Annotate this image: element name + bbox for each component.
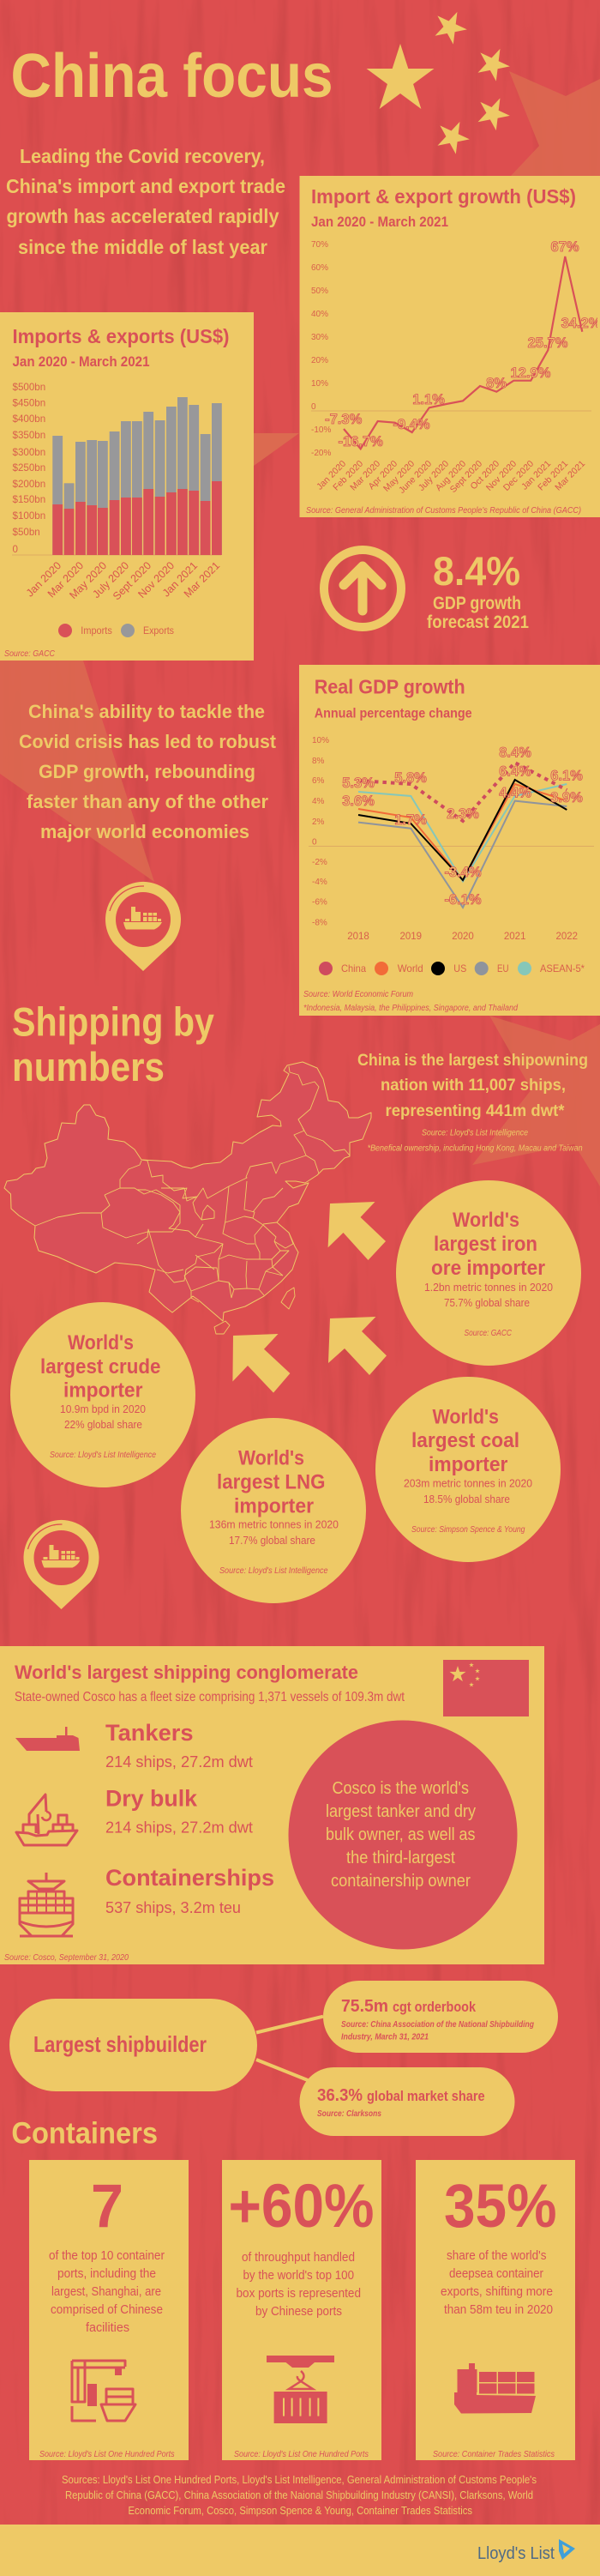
tankers: 214 ships, 27.2m dwt bbox=[105, 1753, 253, 1771]
y axis labels: 8% bbox=[312, 757, 325, 766]
card: 35%: exports, shifting more bbox=[441, 2285, 553, 2299]
card: 7: ports, including the bbox=[57, 2267, 156, 2281]
circle: Cosco callout bbox=[288, 1721, 518, 1949]
GDP text: GDP growth, rebounding bbox=[39, 761, 255, 782]
circle: coal: Source: Simpson Spence & Young bbox=[411, 1525, 525, 1535]
heading: Imports & exports (US$) bbox=[12, 325, 230, 347]
x axis labels: Feb 2021 bbox=[536, 459, 570, 492]
x axis labels: Oct 2020 bbox=[468, 459, 501, 492]
card: 7: of the top 10 container bbox=[49, 2249, 165, 2263]
x axis labels: Sept 2020 bbox=[448, 459, 484, 495]
x axis labels: 2020 bbox=[452, 932, 474, 942]
data labels: -16.7% bbox=[339, 434, 383, 449]
line chart bbox=[344, 256, 582, 449]
circle: coal: largest coal bbox=[411, 1429, 519, 1452]
data labels: 5.3% bbox=[342, 775, 375, 791]
imports bars bbox=[52, 481, 222, 555]
GDP text: major world economies bbox=[40, 821, 249, 842]
y axis labels bbox=[12, 382, 45, 555]
circle: LNG: 136m metric tonnes in 2020 bbox=[209, 1519, 339, 1531]
tankers bbox=[105, 1720, 253, 1771]
y axis labels: 10% bbox=[311, 379, 328, 389]
y axis labels: -20% bbox=[311, 449, 331, 458]
data labels: 5.8% bbox=[394, 770, 427, 786]
y axis labels: 0 bbox=[312, 837, 317, 848]
GDP text: China's ability to tackle the bbox=[28, 701, 265, 722]
x axis labels: Dec 2020 bbox=[501, 459, 536, 493]
line: EU bbox=[358, 801, 567, 908]
circle: coal: World's bbox=[432, 1405, 499, 1429]
x axis labels: Mar 2020 bbox=[348, 459, 382, 492]
card: 35%: share of the world's bbox=[447, 2249, 547, 2263]
line: World bbox=[358, 784, 567, 880]
circle: LNG: importer bbox=[234, 1495, 314, 1518]
y axis labels: -8% bbox=[312, 918, 327, 928]
icon: container hoist bbox=[267, 2356, 334, 2423]
legend: Imports bbox=[81, 624, 112, 636]
arrow: to map 1 bbox=[328, 1202, 386, 1260]
GDP text: Covid crisis has led to robust bbox=[19, 731, 276, 752]
y axis labels: -4% bbox=[312, 878, 327, 887]
dry bulk: 214 ships, 27.2m dwt bbox=[105, 1819, 253, 1837]
pill: orderbook: 75.5m bbox=[341, 1997, 388, 2016]
card: +60%: by Chinese ports bbox=[255, 2305, 342, 2319]
data labels: -7.3% bbox=[325, 412, 363, 427]
stat: GDP forecast bbox=[427, 548, 529, 632]
x axis labels: Apr 2020 bbox=[366, 459, 399, 492]
circle: LNG bbox=[181, 1418, 366, 1603]
y axis labels: $500bn bbox=[12, 382, 45, 393]
x axis labels: Mar 2020 bbox=[45, 559, 86, 600]
heading: Real GDP growth bbox=[315, 676, 465, 698]
x axis labels bbox=[315, 459, 587, 496]
data labels: 2.3% bbox=[447, 806, 479, 822]
data labels: 1.1% bbox=[412, 392, 445, 407]
containerships: Containerships bbox=[105, 1865, 274, 1891]
data labels: 4.4% bbox=[499, 786, 531, 801]
icon: containership bbox=[20, 1873, 73, 1936]
map of China bbox=[4, 1062, 371, 1334]
title: China focus bbox=[10, 42, 333, 111]
circle: coal: importer bbox=[429, 1453, 508, 1476]
y axis labels: 10% bbox=[312, 736, 329, 745]
sources text: Republic of China (GACC), China Association of the Naional Shipbuilding Industry (CANSI), Clarksons, World bbox=[65, 2489, 533, 2501]
x axis labels: July 2020 bbox=[90, 559, 131, 600]
circle: iron ore: 75.7% global share bbox=[444, 1297, 530, 1309]
data labels: 6.1% bbox=[550, 769, 583, 784]
y axis labels: 20% bbox=[311, 356, 328, 365]
circle: coal bbox=[375, 1377, 561, 1562]
pill: largest shipbuilder: Largest shipbuilder bbox=[33, 2031, 207, 2057]
subheading: State-owned Cosco has a fleet size comprising 1,371 vessels of 109.3m dwt bbox=[15, 1690, 405, 1704]
GDP text bbox=[19, 701, 276, 842]
data labels: 12.9% bbox=[511, 365, 551, 381]
x axis labels: Feb 2020 bbox=[331, 459, 365, 492]
card: +60%: Source: Lloyd's List One Hundred Ports bbox=[234, 2450, 369, 2459]
exports bars bbox=[52, 397, 222, 555]
card: 35%: 35% bbox=[444, 2173, 557, 2241]
data labels: 3.9% bbox=[550, 790, 583, 805]
circle: iron ore: 1.2bn metric tonnes in 2020 bbox=[424, 1282, 553, 1294]
x axis labels: 2019 bbox=[400, 932, 422, 942]
line: US bbox=[358, 780, 567, 880]
pill: largest shipbuilder bbox=[9, 1999, 257, 2091]
x axis labels: Jan 2021 bbox=[519, 459, 553, 492]
x axis labels bbox=[24, 559, 222, 602]
legend: US bbox=[453, 962, 466, 974]
data labels: -9.4% bbox=[393, 417, 430, 432]
circle: crude: World's bbox=[68, 1331, 134, 1354]
x axis labels: July 2020 bbox=[417, 459, 451, 493]
circle: LNG: 17.7% global share bbox=[229, 1535, 315, 1547]
data labels: 25.7% bbox=[528, 335, 568, 351]
circle: LNG: Source: Lloyd's List Intelligence bbox=[219, 1566, 328, 1576]
arrow: to map 3 bbox=[232, 1334, 290, 1393]
card: 35%: deepsea container bbox=[449, 2267, 543, 2281]
legend: World bbox=[398, 962, 423, 974]
card: 7: largest, Shanghai, are bbox=[51, 2285, 161, 2299]
legend: Exports bbox=[143, 624, 174, 636]
x axis labels: 2022 bbox=[556, 932, 578, 942]
footnote: *Indonesia, Malaysia, the Philippines, Singapore, and Thailand bbox=[303, 1004, 518, 1013]
data labels bbox=[342, 745, 583, 908]
y axis labels: $150bn bbox=[12, 494, 45, 505]
data labels: 1.7% bbox=[394, 812, 427, 828]
icon: dry bulk bbox=[16, 1795, 77, 1845]
x axis labels: Nov 2020 bbox=[135, 559, 177, 600]
GDP text: faster than any of the other bbox=[27, 791, 268, 812]
y axis labels: $350bn bbox=[12, 430, 45, 441]
y axis labels: 0 bbox=[12, 544, 18, 555]
card: 7: facilities bbox=[86, 2321, 129, 2335]
containerships: 537 ships, 3.2m teu bbox=[105, 1899, 241, 1916]
data labels bbox=[325, 239, 600, 449]
card: +60% bbox=[222, 2160, 381, 2460]
data labels: 34.2% bbox=[561, 316, 600, 331]
y axis labels: 50% bbox=[311, 287, 328, 296]
flag stars bbox=[367, 5, 515, 157]
circle: Cosco callout: bulk owner, as well as bbox=[326, 1825, 475, 1844]
legend: ASEAN-5* bbox=[540, 962, 585, 974]
heading: shipping by numbers bbox=[12, 1000, 215, 1090]
circle: Cosco callout: the third-largest bbox=[346, 1849, 455, 1867]
x axis labels: Jan 2020 bbox=[24, 559, 63, 599]
source: Source: General Administration of Customs People's Republic of China (GACC) bbox=[306, 506, 581, 516]
heading: shipping by numbers: Shipping by bbox=[12, 1000, 215, 1046]
icon: tanker bbox=[15, 1727, 80, 1751]
heading: Import & export growth (US$) bbox=[311, 185, 576, 208]
data labels: -6.1% bbox=[444, 892, 482, 908]
pill: orderbook bbox=[323, 1981, 558, 2053]
circle: LNG: largest LNG bbox=[217, 1470, 326, 1494]
x axis labels: May 2020 bbox=[67, 559, 109, 601]
card: 35% bbox=[416, 2160, 575, 2460]
x axis labels: Jan 2021 bbox=[160, 559, 200, 599]
icon: ship pin bbox=[105, 882, 181, 971]
source: Source: Cosco, September 31, 2020 bbox=[4, 1953, 129, 1963]
pill: orderbook: cgt orderbook bbox=[393, 2000, 477, 2015]
circle: coal: 18.5% global share bbox=[423, 1493, 510, 1505]
card: +60%: by the world's top 100 bbox=[243, 2269, 354, 2283]
intro text bbox=[6, 145, 285, 258]
legend: China bbox=[341, 962, 366, 974]
circle: crude: largest crude bbox=[40, 1355, 161, 1378]
Hainan bbox=[214, 1321, 230, 1334]
y axis labels: $200bn bbox=[12, 479, 45, 490]
sources text: Economic Forum, Cosco, Simpson Spence & Young, Container Trades Statistics bbox=[129, 2505, 472, 2517]
icon: crane and ship bbox=[72, 2361, 135, 2421]
stat: GDP forecast: GDP growth bbox=[433, 594, 521, 613]
y axis labels: 60% bbox=[311, 263, 328, 273]
shipowning text: representing 441m dwt* bbox=[386, 1101, 565, 1120]
circle: iron ore bbox=[396, 1180, 581, 1366]
circle: Cosco callout: largest tanker and dry bbox=[326, 1802, 476, 1821]
circle: coal: 203m metric tonnes in 2020 bbox=[404, 1478, 532, 1490]
circle: Cosco callout: containership owner bbox=[331, 1872, 471, 1891]
subheading: Jan 2020 - March 2021 bbox=[311, 214, 448, 230]
line: China bbox=[358, 763, 567, 821]
circle: Cosco callout: Cosco is the world's bbox=[333, 1779, 469, 1798]
card: 7: Source: Lloyd's List One Hundred Ports bbox=[39, 2450, 175, 2459]
data labels: 6.4% bbox=[499, 763, 531, 779]
Taiwan bbox=[281, 1288, 295, 1309]
x axis labels: Jan 2020 bbox=[315, 459, 348, 492]
x axis labels: Mar 2021 bbox=[553, 459, 587, 492]
data labels: 8% bbox=[486, 376, 507, 391]
panel: import and export growth bbox=[300, 176, 600, 517]
pill: orderbook: Source: China Association of the National Shipbuilding bbox=[341, 2020, 534, 2030]
y axis labels: 70% bbox=[311, 240, 328, 250]
card: 7: comprised of Chinese bbox=[51, 2303, 163, 2317]
circle: iron ore: World's bbox=[453, 1209, 519, 1232]
card: +60%: box ports is represented bbox=[237, 2287, 361, 2301]
circle: crude: 10.9m bpd in 2020 bbox=[60, 1403, 146, 1415]
card: 35%: than 58m teu in 2020 bbox=[444, 2303, 553, 2317]
x axis labels: Aug 2020 bbox=[434, 459, 468, 493]
data labels: -3.4% bbox=[444, 865, 482, 880]
data labels: 3.6% bbox=[342, 793, 375, 809]
y axis labels: $400bn bbox=[12, 413, 45, 425]
intro text: growth has accelerated rapidly bbox=[7, 205, 279, 227]
circle: iron ore: largest iron bbox=[434, 1233, 537, 1256]
circle: crude: 22% global share bbox=[64, 1419, 142, 1431]
intro text: since the middle of last year bbox=[18, 236, 267, 258]
y axis labels: -10% bbox=[311, 425, 331, 435]
circle: crude: importer bbox=[63, 1379, 143, 1402]
x axis labels: May 2020 bbox=[381, 459, 417, 494]
y axis labels: -6% bbox=[312, 897, 327, 908]
y axis labels: 40% bbox=[311, 310, 328, 319]
icon: ship pin 2 bbox=[24, 1520, 99, 1609]
card: +60%: of throughput handled bbox=[242, 2251, 355, 2265]
pill: market share bbox=[300, 2067, 514, 2136]
icon: container ship bbox=[454, 2363, 536, 2414]
flag bbox=[443, 1660, 529, 1716]
x axis labels: 2018 bbox=[347, 932, 369, 942]
intro text: Leading the Covid recovery, bbox=[20, 145, 265, 167]
card: 35%: Source: Container Trades Statistics bbox=[433, 2450, 555, 2459]
dry bulk bbox=[105, 1786, 253, 1837]
panel: Cosco bbox=[0, 1646, 544, 1964]
pill: orderbook: Industry, March 31, 2021 bbox=[341, 2033, 429, 2042]
stat: GDP forecast: 8.4% bbox=[433, 548, 520, 594]
y axis labels: $450bn bbox=[12, 398, 45, 408]
legend bbox=[58, 624, 174, 637]
source: Source: World Economic Forum bbox=[303, 990, 413, 999]
subheading: Annual percentage change bbox=[315, 706, 472, 721]
pill: market share: 36.3% bbox=[317, 2086, 363, 2105]
y axis labels: 30% bbox=[311, 333, 328, 342]
heading: World's largest shipping conglomerate bbox=[15, 1662, 358, 1683]
circle: crude: Source: Lloyd's List Intelligence bbox=[50, 1451, 156, 1460]
heading: containers: Containers bbox=[11, 2117, 158, 2151]
x axis labels: 2021 bbox=[504, 932, 525, 942]
data labels: 67% bbox=[550, 239, 579, 255]
card: +60%: +60% bbox=[228, 2173, 374, 2241]
arrow: to map 2 bbox=[328, 1317, 387, 1375]
tankers: Tankers bbox=[105, 1720, 194, 1746]
logo: Lloyd's List: Lloyd's List bbox=[477, 2543, 555, 2563]
circle: crude bbox=[10, 1302, 195, 1487]
data labels: 8.4% bbox=[499, 745, 531, 760]
panel: imports and exports bbox=[0, 312, 254, 661]
dry bulk: Dry bulk bbox=[105, 1786, 198, 1812]
x axis labels bbox=[347, 932, 578, 942]
subheading: Jan 2020 - March 2021 bbox=[12, 353, 149, 370]
card: 7: 7 bbox=[91, 2173, 123, 2241]
panel: real GDP growth bbox=[299, 665, 600, 1016]
sources text: Sources: Lloyd's List One Hundred Ports, Lloyd's List Intelligence, General Administration of Customs People's bbox=[62, 2474, 537, 2486]
pill: market share: Source: Clarksons bbox=[317, 2109, 381, 2119]
y axis labels: 6% bbox=[312, 776, 325, 786]
shipowning text: Source: Lloyd's List Intelligence bbox=[422, 1129, 528, 1137]
circle: iron ore: Source: GACC bbox=[465, 1329, 513, 1338]
circle: LNG: World's bbox=[238, 1446, 304, 1470]
card: 7 bbox=[29, 2160, 189, 2460]
x axis labels: Sept 2020 bbox=[111, 559, 153, 602]
y axis labels: $100bn bbox=[12, 510, 45, 522]
x axis labels: Nov 2020 bbox=[484, 459, 519, 493]
y axis labels: 4% bbox=[312, 797, 325, 806]
x axis labels: June 2020 bbox=[397, 459, 434, 496]
containerships bbox=[105, 1865, 274, 1916]
source: Source: GACC bbox=[4, 649, 56, 659]
shipowning text: nation with 11,007 ships, bbox=[381, 1076, 566, 1095]
icon: arrow in circle bbox=[324, 550, 401, 627]
heading: shipping by numbers: numbers bbox=[12, 1045, 165, 1090]
intro text: China's import and export trade bbox=[6, 175, 285, 197]
legend: EU bbox=[497, 962, 509, 974]
y axis labels: -2% bbox=[312, 858, 327, 867]
legend bbox=[319, 962, 585, 975]
y axis labels: 2% bbox=[312, 817, 325, 827]
sources text bbox=[62, 2474, 537, 2517]
y axis labels: $300bn bbox=[12, 447, 45, 458]
connectors bbox=[256, 2017, 323, 2080]
circle: iron ore: ore importer bbox=[431, 1257, 545, 1280]
y axis labels bbox=[312, 736, 329, 928]
x axis labels: Mar 2021 bbox=[182, 559, 222, 600]
line: ASEAN-5 bbox=[358, 784, 567, 882]
y axis labels: $250bn bbox=[12, 462, 45, 474]
y axis labels bbox=[311, 240, 331, 458]
footer bar bbox=[0, 2525, 600, 2576]
pill: market share: global market share bbox=[367, 2089, 485, 2104]
y axis labels: 0 bbox=[311, 402, 316, 412]
y axis labels: $50bn bbox=[12, 527, 40, 538]
stat: GDP forecast: forecast 2021 bbox=[427, 612, 529, 632]
shipowning text bbox=[357, 1051, 588, 1153]
